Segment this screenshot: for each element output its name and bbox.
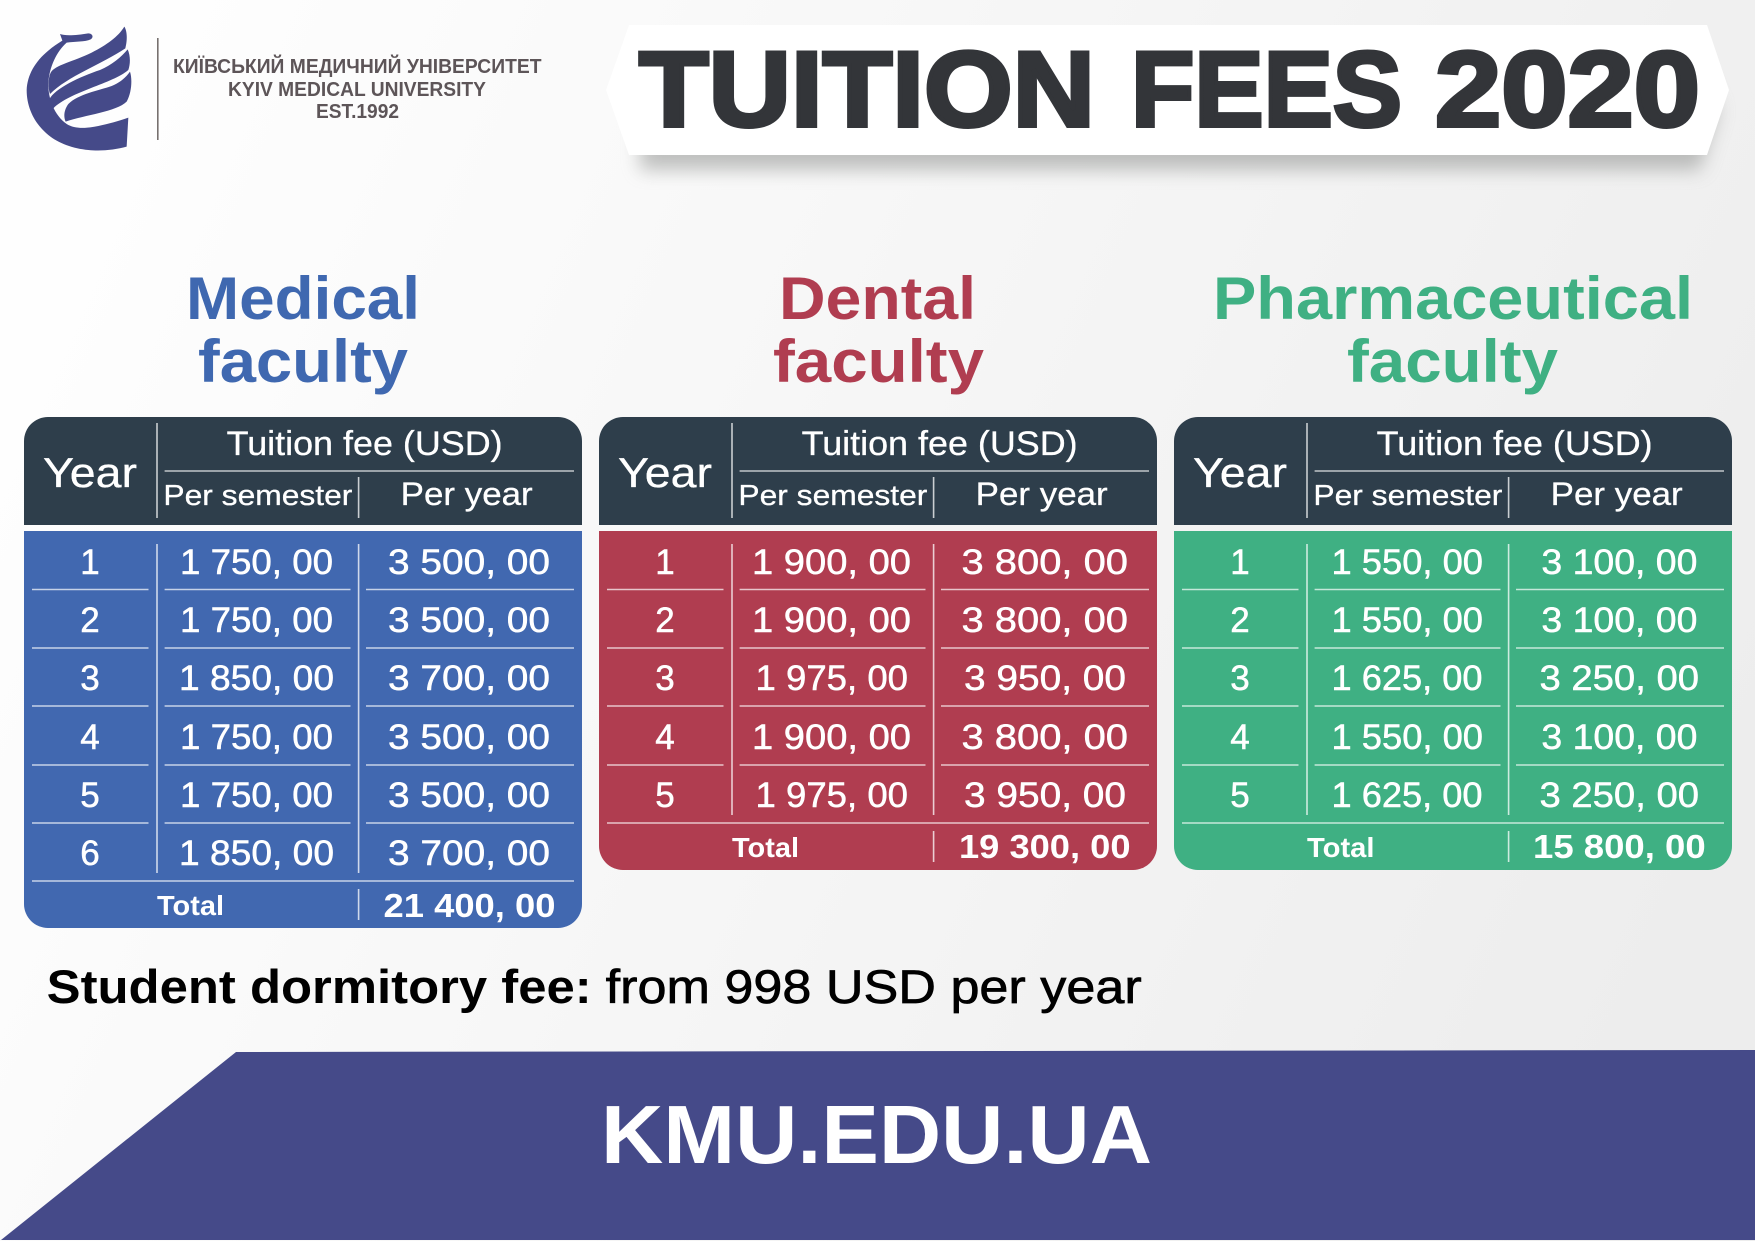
table body: 3 250, 00 <box>1540 776 1699 815</box>
table body: 1 <box>80 543 100 582</box>
table body: 1 975, 00 <box>756 776 908 815</box>
table body: 1 750, 00 <box>180 543 333 582</box>
table body: Total <box>1307 832 1374 863</box>
heading: Pharmaceutical faculty <box>1213 265 1693 395</box>
title: TUITION <box>639 29 1095 149</box>
table body: Total <box>732 832 799 863</box>
table body: 21 400, 00 <box>384 887 556 924</box>
table body: Total <box>157 890 224 921</box>
table header: Per semester <box>738 480 928 512</box>
website url: KMU.EDU.UA <box>601 1088 1152 1181</box>
title banner <box>606 25 1729 170</box>
table body: 1 850, 00 <box>179 659 334 698</box>
table body: 3 100, 00 <box>1541 718 1697 757</box>
table body: 4 <box>1230 718 1250 757</box>
table body: 1 900, 00 <box>752 601 911 640</box>
logo: Kyiv Medical University <box>27 27 542 150</box>
table header: Tuition fee (USD) <box>227 425 503 463</box>
panel: Pharmaceutical faculty table <box>1174 417 1732 870</box>
dormitory fee note: from 998 USD per year <box>606 960 1142 1013</box>
panel: Dental faculty table <box>599 417 1157 870</box>
table header: Tuition fee (USD) <box>1377 425 1653 463</box>
table header: Per semester <box>1313 480 1503 512</box>
table body: 1 550, 00 <box>1332 718 1483 757</box>
table body: 6 <box>80 834 100 873</box>
table body: 4 <box>655 718 675 757</box>
table body: 1 900, 00 <box>752 543 911 582</box>
table body: 1 <box>1230 543 1250 582</box>
table body: 5 <box>80 776 100 815</box>
heading: Dental faculty: faculty <box>773 328 985 395</box>
table header: Year <box>618 449 712 496</box>
table body: 3 800, 00 <box>962 543 1128 582</box>
table header: Per year <box>401 476 533 512</box>
table header: Per year <box>976 476 1108 512</box>
table body: 4 <box>80 718 100 757</box>
university name <box>173 54 542 123</box>
table body: 2 <box>655 601 675 640</box>
table body: 1 750, 00 <box>180 601 333 640</box>
table header: Per semester <box>163 480 353 512</box>
table body: 1 975, 00 <box>756 659 908 698</box>
table body: 3 <box>80 659 100 698</box>
table header: Per year <box>1551 476 1683 512</box>
table body <box>1174 531 1732 870</box>
table body: 1 625, 00 <box>1332 776 1482 815</box>
heading: Pharmaceutical faculty: faculty <box>1347 328 1559 395</box>
table body: 1 750, 00 <box>180 718 333 757</box>
table body: 3 100, 00 <box>1541 601 1697 640</box>
heading: Medical faculty: faculty <box>198 328 409 395</box>
table body: 3 <box>655 659 675 698</box>
table body: 3 800, 00 <box>962 601 1128 640</box>
table body: 1 750, 00 <box>180 776 333 815</box>
table body: 1 <box>655 543 675 582</box>
table body: 5 <box>1230 776 1250 815</box>
table header <box>24 417 582 525</box>
table body: 1 900, 00 <box>752 718 911 757</box>
table header: Tuition fee (USD) <box>802 425 1078 463</box>
table body: 3 500, 00 <box>388 776 550 815</box>
heading: Medical faculty <box>186 265 420 395</box>
table body: 1 625, 00 <box>1332 659 1482 698</box>
table body: 15 800, 00 <box>1533 828 1706 865</box>
heading: Dental faculty <box>773 265 985 395</box>
table body: 3 250, 00 <box>1540 659 1699 698</box>
table body: 3 700, 00 <box>388 659 550 698</box>
table body: 3 700, 00 <box>388 834 550 873</box>
icon: swan feather emblem <box>27 27 131 150</box>
footer banner <box>1 1050 1755 1240</box>
table body: 19 300, 00 <box>959 828 1130 865</box>
dormitory fee note: Student dormitory fee: <box>47 960 592 1013</box>
table body: 1 850, 00 <box>179 834 334 873</box>
title: FEES <box>1131 29 1402 149</box>
table body: 3 500, 00 <box>388 718 550 757</box>
table header: Year <box>43 449 137 496</box>
table header <box>1174 417 1732 525</box>
table body: 3 100, 00 <box>1541 543 1697 582</box>
table header <box>599 417 1157 525</box>
heading: Medical faculty: Medical <box>186 265 420 332</box>
table body: 5 <box>655 776 675 815</box>
title: 2020 <box>1435 29 1700 149</box>
university name: КИЇВСЬКИЙ МЕДИЧНИЙ УНІВЕРСИТЕТ <box>173 54 542 78</box>
panel: Medical faculty table <box>24 417 582 928</box>
table body: 3 800, 00 <box>962 718 1128 757</box>
table body <box>599 531 1157 870</box>
table body: 3 950, 00 <box>964 776 1126 815</box>
university name: KYIV MEDICAL UNIVERSITY <box>228 78 486 101</box>
table body: 1 550, 00 <box>1332 601 1483 640</box>
heading: Dental faculty: Dental <box>779 265 976 332</box>
table body: 3 950, 00 <box>964 659 1126 698</box>
table body <box>24 531 582 928</box>
table header: Year <box>1193 449 1287 496</box>
university name: EST.1992 <box>316 101 399 123</box>
table body: 3 500, 00 <box>388 543 550 582</box>
table body: 2 <box>1230 601 1250 640</box>
heading: Pharmaceutical faculty: Pharmaceutical <box>1213 265 1693 332</box>
table body: 3 500, 00 <box>388 601 550 640</box>
table body: 2 <box>80 601 100 640</box>
table body: 3 <box>1230 659 1250 698</box>
table body: 1 550, 00 <box>1332 543 1483 582</box>
dormitory fee note <box>47 960 1142 1013</box>
